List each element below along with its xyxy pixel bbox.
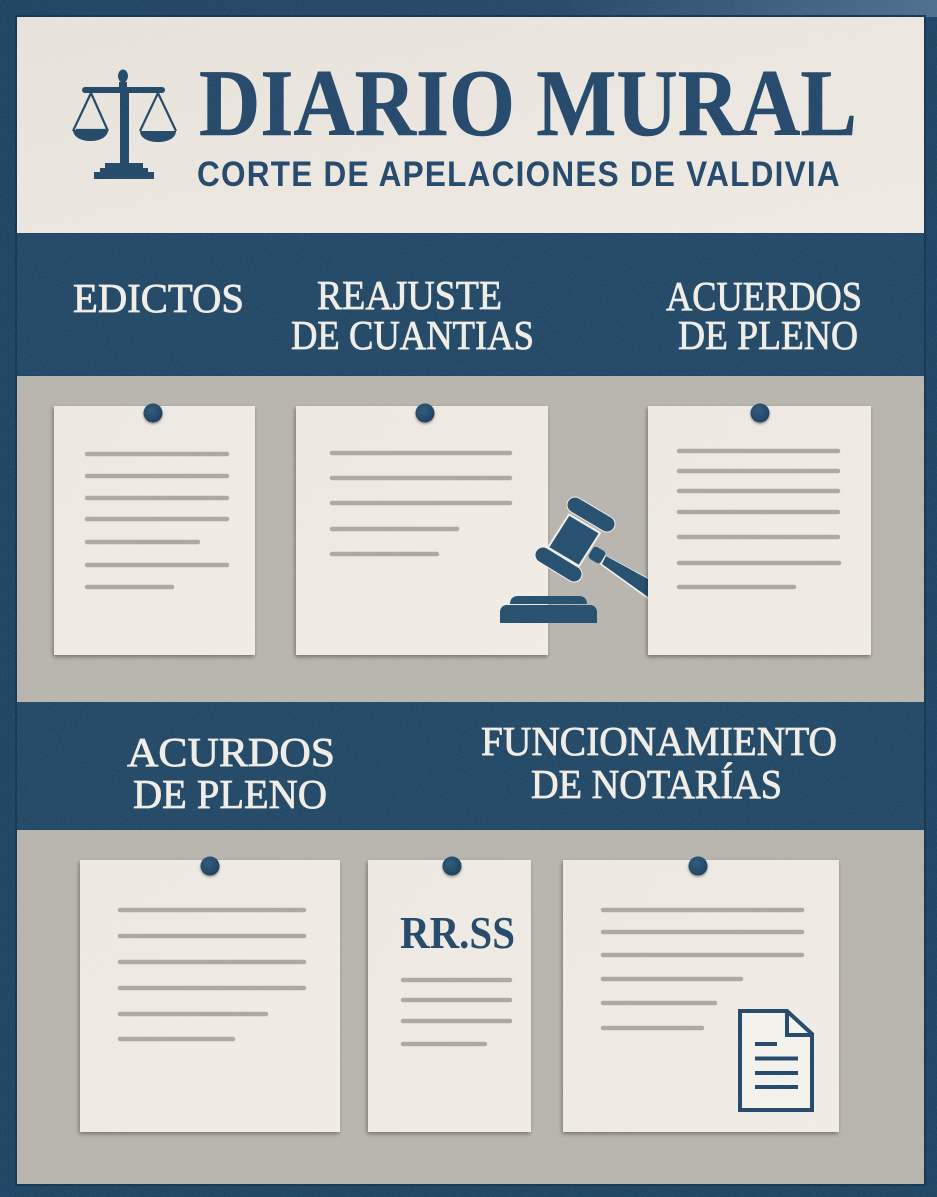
heading: Reajuste de cuantias: REAJUSTE [317,272,502,318]
heading: Acurdos de pleno [127,729,335,817]
heading: Edictos: EDICTOS [73,275,244,321]
icon: gavel [500,505,648,623]
icon: scales of justice [73,70,176,179]
heading: Acuerdos de pleno [666,273,862,358]
note: edictos [54,404,255,655]
heading: Acuerdos de pleno: DE PLENO [678,312,858,358]
label: RR.SS: RR.SS [400,907,515,958]
heading: Reajuste de cuantias: DE CUANTIAS [291,312,534,358]
note: reajuste de cuantias [296,404,548,655]
subtitle: CORTE DE APELACIONES DE VALDIVIA [197,156,840,194]
panel: upper notice area [17,376,924,702]
note: funcionamiento de notarias [563,856,839,1132]
pin [750,404,770,422]
note: acurdos de pleno [80,856,340,1132]
note: acuerdos de pleno [648,404,871,655]
pin [144,404,162,422]
pin [200,856,220,876]
heading: Acurdos de pleno: DE PLENO [133,771,327,817]
heading: Acurdos de pleno: ACURDOS [127,729,335,775]
note: RR.SS [368,856,531,1132]
panel: lower category band [17,702,924,829]
panel: upper category band [17,234,924,375]
heading: Reajuste de cuantias [291,272,534,358]
pin [688,856,708,876]
panel: header [17,17,924,233]
panel: lower notice area [17,830,924,1184]
heading: Funcionamiento de notarias [481,718,837,807]
icon: document [740,1011,812,1110]
title: DIARIO MURAL [199,50,857,156]
pin [442,856,462,876]
heading: Funcionamiento de notarias: DE NOTARÍAS [531,761,782,807]
heading: Acuerdos de pleno: ACUERDOS [666,273,862,319]
pin [416,404,434,422]
heading: Funcionamiento de notarias: FUNCIONAMIENTO [481,718,837,764]
